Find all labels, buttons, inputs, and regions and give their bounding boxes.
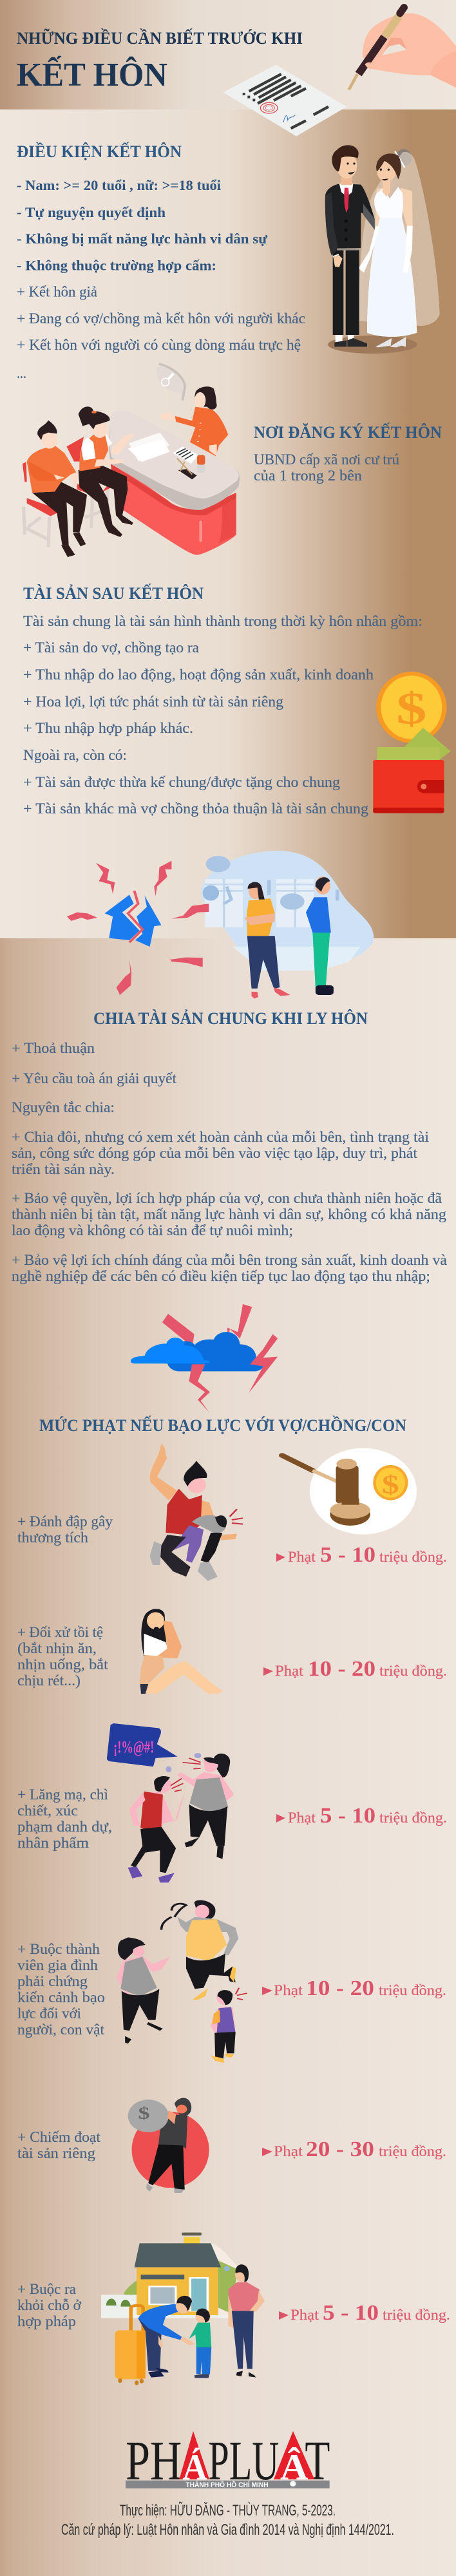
row 3 text: + Lăng mạ, chì (17, 1786, 108, 1803)
row 4 penalty: triệu đồng. (379, 1982, 446, 1998)
row 1: beating (17, 1444, 447, 1581)
counter top (109, 412, 240, 510)
row 5 penalty: Phạt (274, 2143, 303, 2159)
father (138, 2318, 162, 2371)
house (124, 2243, 238, 2316)
man with belt (195, 1900, 215, 1920)
row 1 text (17, 1513, 113, 1546)
heading: where to register: NƠI ĐĂNG KÝ KẾT HÔN (254, 423, 442, 442)
row 4 penalty: Phạt (274, 1982, 303, 1998)
row 5 penalty: 20 - 30 (306, 2137, 374, 2161)
text: dividing property rules: + Yêu cầu toà án giải quyết (12, 1070, 177, 1086)
row 3 illustration: shouting couple (107, 1723, 234, 1882)
text: where to register: của 1 trong 2 bên (254, 468, 363, 484)
woman (79, 406, 135, 537)
text: dividing property rules: sản, công sức đóng góp của mỗi bên vào việc tạo lập, duy trì, phát (12, 1145, 418, 1161)
heading: dividing property at divorce: CHIA TÀI SẢN CHUNG KHI LY HÔN (93, 1009, 368, 1028)
condition 3: - Không bị mất năng lực hành vi dân sự (17, 231, 267, 247)
icon: wallet with coin (373, 672, 451, 813)
illustration: quarrelling couple (201, 851, 374, 999)
man (306, 876, 334, 995)
text: dividing property rules: lao động và không có tài sản để tự nuôi mình; (12, 1222, 293, 1238)
row 6 text: khỏi chỗ ở (17, 2297, 82, 2313)
row 1 illustration: man hitting (150, 1444, 243, 1581)
credits (61, 2501, 394, 2539)
row 2 text (17, 1624, 109, 1689)
row 6 penalty: Phạt (290, 2307, 319, 2323)
row 3 penalty: Phạt (288, 1810, 316, 1826)
row 5 penalty (262, 2137, 446, 2161)
list: common property: + Hoa lợi, lợi tức phát sinh từ tài sản riêng (23, 694, 284, 710)
chairs (23, 437, 111, 547)
row 3 penalty (276, 1804, 447, 1828)
row 5 illustration: thief with money bag (128, 2098, 209, 2193)
row 3 penalty: triệu đồng. (379, 1810, 447, 1826)
illustration: bride and groom (325, 145, 440, 354)
credits: Thực hiện: HỮU ĐĂNG - THÙY TRANG, 5-2023. (120, 2501, 336, 2519)
counter base (111, 464, 236, 555)
row 4 text: + Buộc thành (17, 1941, 100, 1957)
row 1 text: + Đánh đập gây (17, 1513, 113, 1530)
row 4 text: phải chứng (17, 1973, 88, 1989)
groom (325, 145, 375, 346)
row 5 illustration: thief with money bag: $ (138, 2103, 150, 2123)
blue bubble background (201, 851, 374, 971)
row 2 penalty: triệu đồng. (379, 1663, 447, 1679)
row 6 penalty: triệu đồng. (383, 2307, 450, 2323)
woman shouting (118, 1937, 144, 1960)
title (17, 29, 303, 93)
row 6 text (17, 2281, 82, 2329)
list: common property: + Tài sản khác mà vợ chồng thỏa thuận là tài sản chung (23, 800, 369, 817)
row 2: mistreatment (17, 1609, 447, 1694)
suitcase (131, 2306, 143, 2333)
icon: storm cloud with lightning (131, 1304, 278, 1412)
heading: marriage conditions: ĐIỀU KIỆN KẾT HÔN (17, 142, 182, 161)
condition 4: - Không thuộc trường hợp cấm: (17, 258, 216, 273)
row 3 text: chiết, xúc (17, 1803, 78, 1819)
row 2 text: chịu rét...) (17, 1672, 81, 1689)
text: dividing property rules: + Bảo vệ quyền, lợi ích hợp pháp của vợ, con chưa thành niên hoặc đã (12, 1190, 442, 1206)
row 5 penalty: triệu đồng. (379, 2143, 446, 2159)
prohibited 3: + Kết hôn với người có cùng dòng máu trực hệ (17, 337, 301, 353)
illustration: registry office counter (23, 364, 240, 557)
logo: Pháp Luật (126, 2430, 330, 2492)
row 1 text: thương tích (17, 1530, 89, 1546)
logo: Pháp Luật: Á (182, 2448, 207, 2488)
row 2 text: (bắt nhịn ăn, (17, 1640, 97, 1656)
row 2 text: nhịn uống, bắt (17, 1656, 109, 1672)
text: dividing property rules: + Thoả thuận (12, 1040, 95, 1056)
condition 2: - Tự nguyện quyết định (17, 204, 166, 220)
row 1 illustration: gavel and coin: $ (382, 1471, 399, 1499)
bride (359, 149, 440, 347)
row 5 text (17, 2129, 101, 2161)
icon: wallet with coin: $ (396, 684, 427, 734)
row 3 text (17, 1786, 112, 1851)
text: where to register: UBND cấp xã nơi cư trú (254, 451, 399, 468)
ellipsis: ... (17, 365, 26, 381)
row 3 text: phạm danh dự, (17, 1819, 112, 1835)
row 3 illustration: shouting couple: ¡!%@#! (113, 1738, 154, 1757)
row 4 text: kiến cảnh bạo (17, 1989, 105, 2005)
list: marriage conditions (17, 177, 305, 381)
row 4: forcing to witness violence (17, 1900, 446, 2063)
row 2 penalty: 10 - 20 (308, 1657, 375, 1681)
logo: Pháp Luật: PH (126, 2430, 182, 2492)
man shouting (154, 1777, 171, 1793)
row 1 penalty: 5 - 10 (320, 1543, 375, 1567)
man (27, 421, 87, 557)
condition 1: - Nam: >= 20 tuổi , nữ: >=18 tuổi (17, 177, 221, 193)
row 2 penalty: Phạt (275, 1663, 304, 1679)
row 2 text: + Đối xử tồi tệ (17, 1624, 103, 1640)
logo: Pháp Luật: Ậ (280, 2447, 308, 2488)
child (216, 1990, 233, 2005)
icon: document with stamp (223, 65, 347, 137)
heading: property after marriage: TÀI SẢN SAU KẾT HÔN (23, 584, 204, 603)
logo: Pháp Luật: T (305, 2430, 330, 2492)
list: common property: + Thu nhập hợp pháp khác. (23, 720, 193, 736)
row 6 illustration: family leaving house (101, 2233, 265, 2385)
thought bubble (157, 366, 185, 401)
row 3 text: nhân phẩm (17, 1835, 89, 1851)
row 3 penalty: 5 - 10 (320, 1804, 375, 1828)
clerk (159, 386, 228, 456)
row 4 illustration: family violence (117, 1900, 247, 2063)
logo: Pháp Luật: THÀNH PHỐ HỒ CHÍ MINH (185, 2480, 269, 2489)
text: dividing property rules: + Bảo vệ lợi ích chính đáng của mỗi bên trong sản xuất, kinh doanh và (12, 1252, 447, 1268)
text: dividing property rules: thành niên bị tàn tật, mất năng lực hành vi dân sự, không có khả năng (12, 1206, 447, 1222)
row 5 text: + Chiếm đoạt (17, 2129, 101, 2145)
background: top band (0, 0, 456, 109)
logo: Pháp Luật: PLU (208, 2430, 279, 2492)
row 4 text: viên gia đình (17, 1957, 99, 1973)
list: common property (23, 613, 423, 817)
row 1 penalty: Phạt (288, 1549, 316, 1565)
row 6 text: hợp pháp (17, 2313, 76, 2329)
row 4 text: người, con vật (17, 2022, 105, 2038)
woman shouting (214, 1754, 230, 1777)
mother (235, 2267, 249, 2282)
row 6: forced out of home (17, 2233, 450, 2385)
text: where to register (254, 451, 399, 484)
background: middle band (0, 109, 456, 938)
text: dividing property rules: triển tài sản này. (12, 1161, 115, 1177)
row 4 text (17, 1941, 105, 2038)
text: dividing property rules: + Chia đôi, nhưng có xem xét hoàn cảnh của mỗi bên, tình trạng tài (12, 1129, 429, 1145)
woman (244, 882, 290, 999)
title line two: KẾT HÔN (17, 55, 167, 93)
row 1 penalty: triệu đồng. (379, 1549, 447, 1565)
list: common property: Ngoài ra, còn có: (23, 747, 127, 763)
row 6 penalty (279, 2301, 450, 2325)
prohibited 2: + Đang có vợ/chồng mà kết hôn với người khác (17, 310, 305, 327)
row 5 text: tài sản riêng (17, 2145, 96, 2161)
row 4 text: lực đối với (17, 2005, 81, 2022)
text: dividing property rules: nghề nghiệp để các bên có điều kiện tiếp tục lao động tạo thu nhập; (12, 1268, 430, 1284)
list: common property: Tài sản chung là tài sản hình thành trong thời kỳ hôn nhân gồm: (23, 613, 423, 629)
row 6 text: + Buộc ra (17, 2281, 76, 2297)
list: common property: + Tài sản do vợ, chồng tạo ra (23, 639, 199, 656)
title line one: NHỮNG ĐIỀU CẦN BIẾT TRƯỚC KHI (17, 29, 303, 48)
row 5: seizing property (17, 2098, 446, 2193)
row 1 penalty (276, 1543, 447, 1567)
heading: penalties for violence: MỨC PHẠT NẾU BẠO LỰC VỚI VỢ/CHỒNG/CON (39, 1416, 406, 1435)
row 6 penalty: 5 - 10 (323, 2301, 379, 2325)
speech bubble (107, 1723, 177, 1766)
icon: hand holding pen (349, 8, 456, 90)
list: common property: + Thu nhập do lao động, hoạt động sản xuất, kinh doanh (23, 667, 374, 683)
row 2 illustration: frightened woman (140, 1609, 222, 1694)
text: dividing property rules (12, 1040, 447, 1284)
prohibited 1: + Kết hôn giả (17, 283, 97, 300)
child (195, 2309, 211, 2324)
text: dividing property rules: Nguyên tắc chia: (12, 1099, 115, 1115)
row 3: insults (17, 1723, 447, 1882)
list: common property: + Tài sản được thừa kế chung/được tặng cho chung (23, 774, 341, 790)
row 2 penalty (263, 1657, 447, 1681)
illustration: broken house with zigzags (67, 861, 209, 995)
row 1 illustration: gavel and coin (282, 1448, 417, 1535)
row 4 penalty (262, 1976, 446, 2000)
windows (205, 879, 314, 927)
row 4 penalty: 10 - 20 (306, 1976, 374, 2000)
background: lower band (0, 938, 456, 2576)
